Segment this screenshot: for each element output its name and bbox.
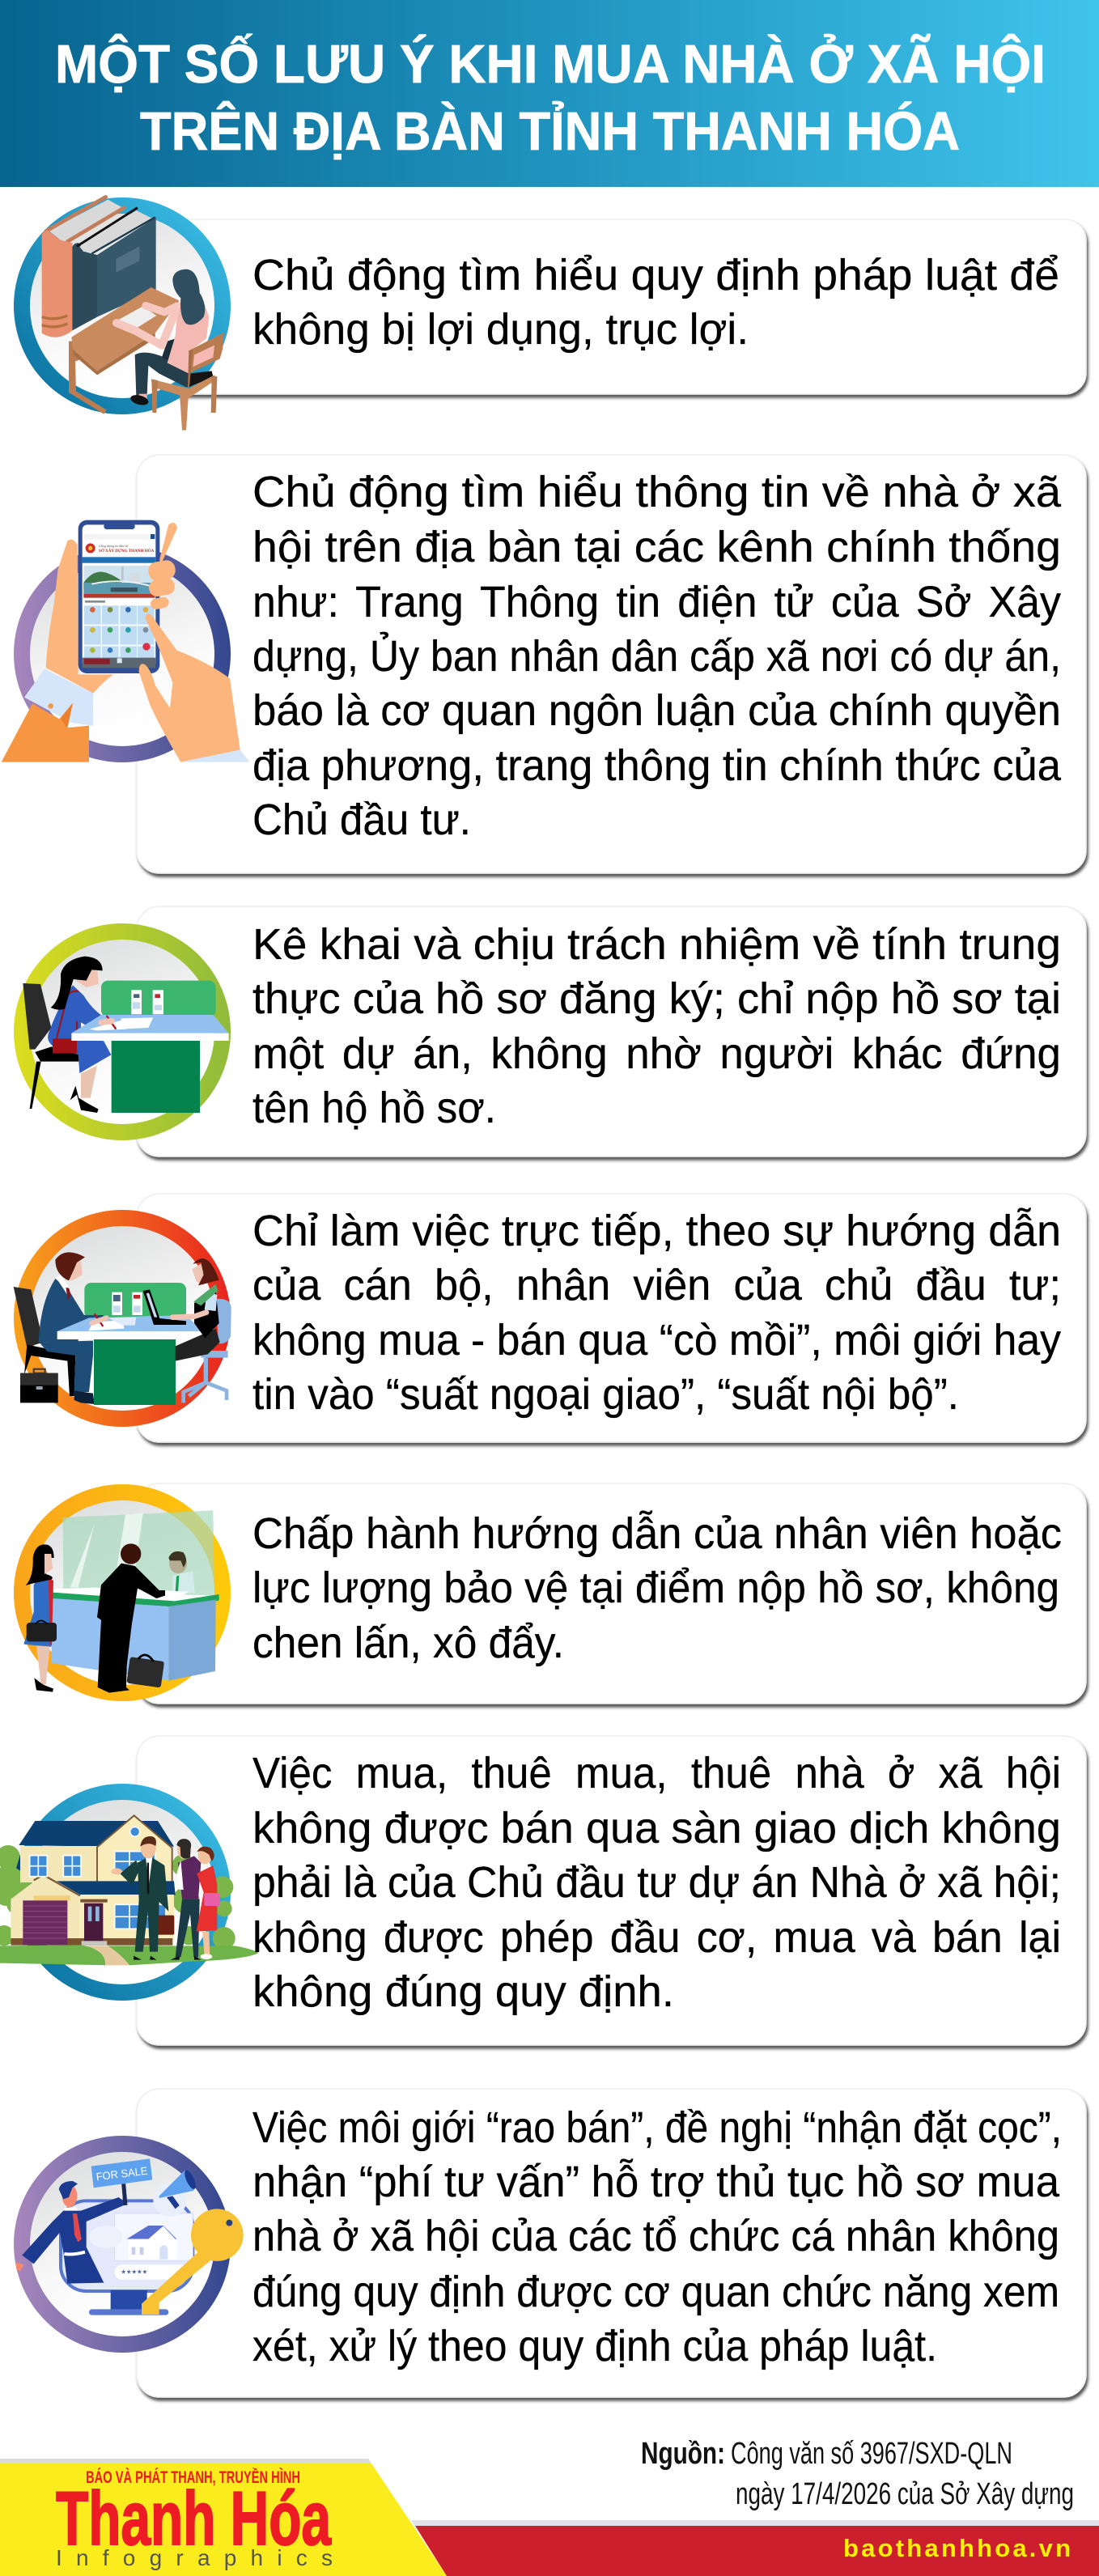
icon: hands holding phone: SỞ XÂY DỰNG THANH HÓA — [99, 549, 155, 554]
text block 1: không bị lợi dụng, trục lợi. — [252, 305, 749, 354]
text block 7: xét, xử lý theo quy định của pháp luật. — [252, 2322, 937, 2370]
card 7 background — [137, 2089, 1086, 2397]
text block 2: hội trên địa bàn tại các kênh chính thống — [252, 523, 1061, 571]
icon: agent, for sale sign, house on monitor and key: ★★★★★ — [121, 2268, 148, 2275]
text block 6: không được phép đầu cơ, mua và bán lại — [252, 1913, 1061, 1962]
panel: tip 3 — [14, 906, 1086, 1156]
text block 6: không đúng quy định. — [252, 1967, 674, 2016]
card 1 background — [137, 219, 1086, 394]
panel: tip 7 — [14, 2089, 1086, 2397]
icon: hands holding phone — [2, 520, 249, 762]
text block 1: Chủ động tìm hiểu quy định pháp luật để — [252, 251, 1059, 299]
logo name: Thanh Hóa — [56, 2476, 332, 2561]
text block 2: báo là cơ quan ngôn luận của chính quyền — [252, 686, 1061, 735]
source note — [641, 2437, 1074, 2511]
card 3 background — [137, 906, 1086, 1156]
text block 5: Chấp hành hướng dẫn của nhân viên hoặc — [252, 1509, 1062, 1558]
text block 6: phải là của Chủ đầu tư dự án Nhà ở xã hội; — [252, 1858, 1061, 1907]
text block 7: nhà ở xã hội của các tổ chức cá nhân không — [252, 2212, 1059, 2260]
text block 7: nhận “phí tư vấn” hỗ trợ thủ tục hồ sơ mua — [252, 2158, 1060, 2206]
icon: house with agent and family — [0, 1784, 258, 2001]
icon: woman filling in form at desk — [14, 923, 231, 1140]
text block 1 — [252, 251, 1059, 354]
footer band — [0, 2459, 1099, 2576]
text block 3 — [252, 920, 1061, 1132]
text block 7 — [252, 2103, 1062, 2370]
icon: people at service counter — [14, 1484, 231, 1701]
panel: tip 1 — [14, 197, 1086, 431]
text block 6 — [252, 1749, 1061, 2016]
text block 3: một dự án, không nhờ người khác đứng — [252, 1029, 1061, 1078]
text block 2: Chủ đầu tư. — [252, 796, 471, 844]
icon: books and woman at desk — [14, 197, 231, 431]
card 2 background — [137, 455, 1086, 873]
card 5 background — [137, 1483, 1086, 1704]
card 6 background — [137, 1736, 1086, 2045]
text block 4: tin vào “suất ngoại giao”, “suất nội bộ”. — [252, 1370, 959, 1419]
text block 4: của cán bộ, nhân viên của chủ đầu tư; — [252, 1261, 1061, 1309]
panel: tip 5 — [14, 1483, 1086, 1704]
text block 4: không mua - bán qua “cò mồi”, môi giới hay — [252, 1316, 1061, 1364]
icon: agent, for sale sign, house on monitor and key: FOR SALE — [95, 2165, 148, 2183]
text block 5: chen lấn, xô đẩy. — [252, 1619, 564, 1667]
title line 2: TRÊN ĐỊA BÀN TỈNH THANH HÓA — [140, 101, 960, 162]
icon: hands holding phone: Cổng thông tin điện tử — [99, 545, 129, 548]
text block 5 — [252, 1509, 1062, 1667]
website: baothanhhoa.vn — [843, 2534, 1071, 2562]
text block 2: dựng, Ủy ban nhân dân cấp xã nơi có dự án, — [252, 632, 1061, 681]
text block 4 — [252, 1207, 1061, 1419]
header banner — [0, 0, 1099, 187]
panel: tip 6 — [0, 1736, 1086, 2045]
logo subtitle: Infographics — [56, 2545, 333, 2570]
text block 5: lực lượng bảo vệ tại điểm nộp hồ sơ, không — [252, 1564, 1059, 1612]
text block 6: Việc mua, thuê mua, thuê nhà ở xã hội — [252, 1749, 1061, 1797]
text block 2: Chủ động tìm hiểu thông tin về nhà ở xã — [252, 468, 1062, 516]
text block 4: Chỉ làm việc trực tiếp, theo sự hướng dẫn — [252, 1207, 1061, 1255]
icon: agent, for sale sign, house on monitor and key — [14, 2136, 244, 2353]
text block 2: địa phương, trang thông tin chính thức của — [252, 741, 1062, 790]
text block 3: Kê khai và chịu trách nhiệm về tính trung — [252, 920, 1061, 969]
panel: tip 4 — [14, 1194, 1086, 1442]
icon: man and staff at desk — [14, 1210, 231, 1427]
panel: tip 2 — [2, 455, 1086, 873]
title line 1: MỘT SỐ LƯU Ý KHI MUA NHÀ Ở XÃ HỘI — [55, 33, 1046, 95]
text block 2 — [252, 468, 1062, 844]
text block 6: không được bán qua sàn giao dịch không — [252, 1804, 1061, 1852]
text block 2: như: Trang Thông tin điện tử của Sở Xây — [252, 578, 1061, 626]
card 4 background — [137, 1194, 1086, 1442]
text block 3: tên hộ hồ sơ. — [252, 1084, 496, 1132]
source note: Nguồn: — [641, 2437, 725, 2471]
logo tagline: BÁO VÀ PHÁT THANH, TRUYỀN HÌNH — [86, 2468, 300, 2487]
text block 3: thực của hồ sơ đăng ký; chỉ nộp hồ sơ tại — [252, 974, 1061, 1023]
